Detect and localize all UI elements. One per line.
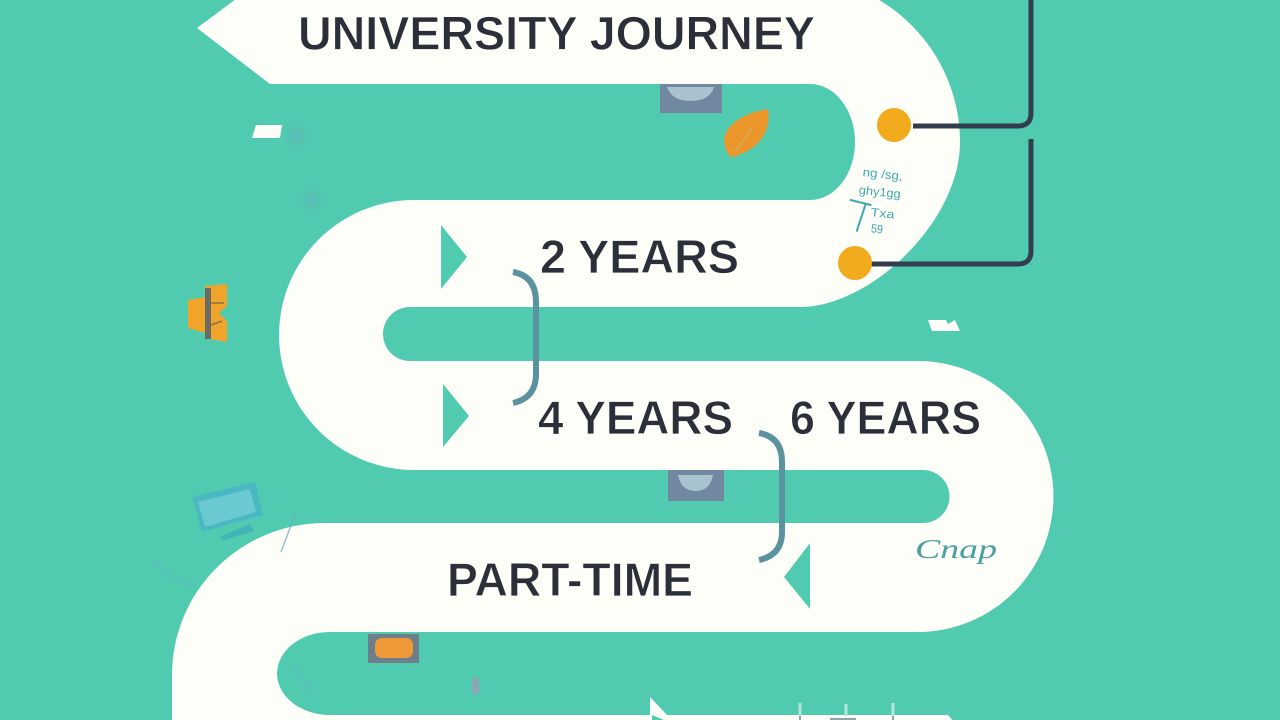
arrow: 4 years <box>443 384 469 447</box>
connector: lower <box>870 139 1031 264</box>
small scribbled note: 59 <box>870 221 884 236</box>
small faded smudges <box>288 127 320 208</box>
icon: small sketches <box>153 512 479 695</box>
arrow: bottom <box>650 697 667 720</box>
arrow: 2 years <box>441 225 467 289</box>
label: 2 years: 2 YEARS <box>540 230 739 283</box>
bracket: 2 to 4 years <box>513 272 536 403</box>
small scribbled note: ghy1gg <box>858 183 901 201</box>
label: 6 years: 6 YEARS <box>790 391 981 444</box>
icon: leaf <box>724 109 769 157</box>
label: part-time: PART-TIME <box>447 553 693 606</box>
icon: middle box <box>668 470 724 501</box>
arrow: part-time <box>784 543 810 609</box>
icon: bottom box <box>368 634 419 663</box>
icon: top box <box>660 84 722 113</box>
small white marks <box>252 125 960 331</box>
small scribbled note: ng /sg, <box>862 165 903 183</box>
connector: upper <box>913 0 1031 126</box>
bracket: 4/6 years to part-time <box>759 433 782 560</box>
small scribbled note <box>846 164 903 238</box>
small scribbled note: Txa <box>870 205 896 222</box>
icon: orange building <box>188 284 227 342</box>
title: UNIVERSITY JOURNEY <box>298 6 815 60</box>
small bottom marks <box>800 703 893 720</box>
label: 4 years: 4 YEARS <box>538 391 733 444</box>
icon: monitor <box>192 482 263 540</box>
winding road <box>172 0 1053 720</box>
small caption: Cnap: Cnap <box>915 534 997 564</box>
dot: lower <box>838 246 872 280</box>
dot: upper <box>877 108 911 142</box>
